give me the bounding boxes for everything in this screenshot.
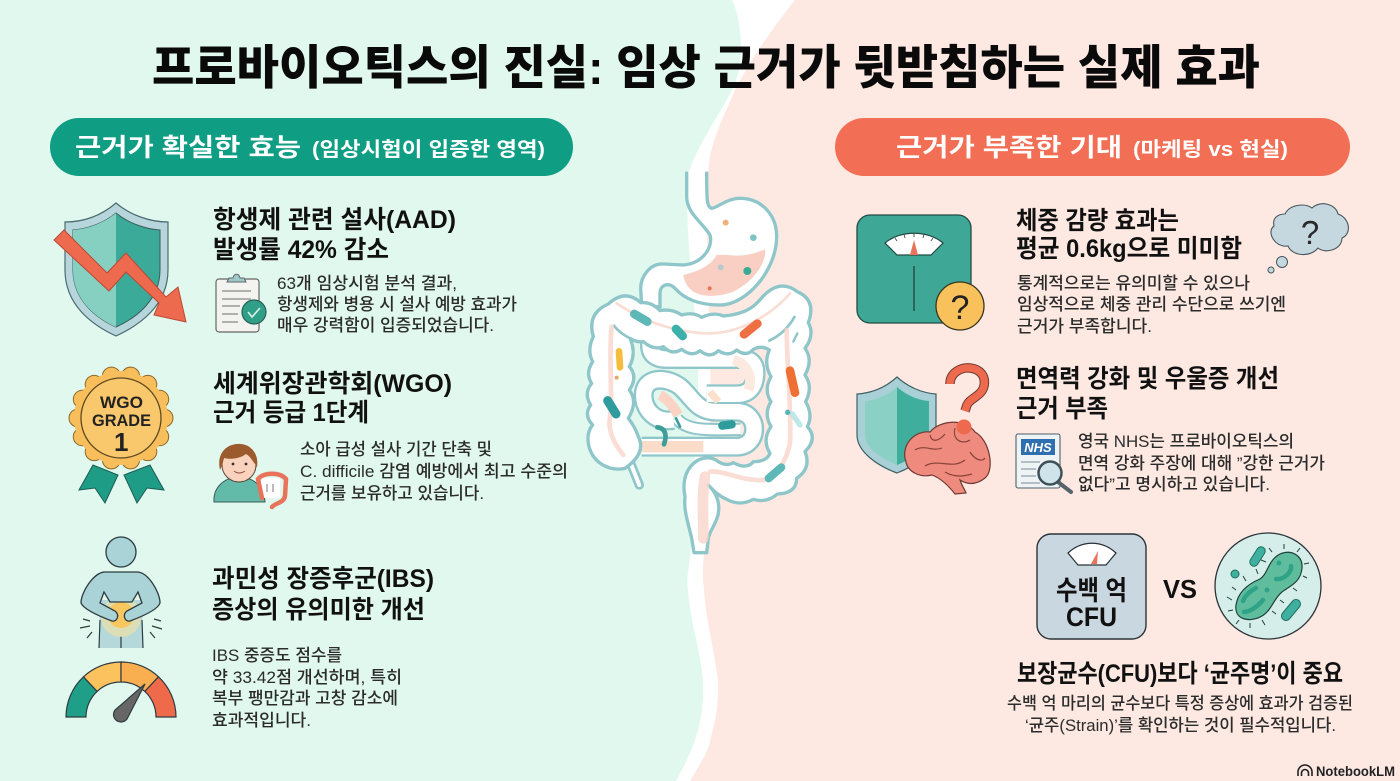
text: weight loss detail: 임상적으로 체중 관리 수단으로 쓰기엔	[1017, 295, 1286, 314]
small intestine	[642, 303, 756, 447]
heading: weight loss: 체중 감량 효과는	[1016, 207, 1179, 235]
icon: bacterial strain under microscope	[1215, 533, 1321, 639]
icon: CFU scale card: 수백 억	[1056, 576, 1127, 606]
heading: WGO: 근거 등급 1단계	[213, 399, 369, 427]
icon: WGO grade 1 medal: GRADE	[92, 411, 151, 430]
text: NHS detail	[1078, 432, 1325, 494]
icon: thought cloud with question mark	[1268, 204, 1348, 273]
text: WGO detail: C. difficile 감염 예방에서 최고 수준의	[300, 462, 568, 481]
icon: NHS document with magnifier	[1016, 434, 1071, 492]
text: IBS detail	[212, 646, 402, 730]
heading: immunity and depression: 근거 부족	[1016, 395, 1108, 423]
stomach	[641, 172, 777, 307]
text: AAD detail: 매우 강력함이 입증되었습니다.	[277, 316, 494, 335]
heading: AAD	[213, 206, 456, 264]
left header pill: (임상시험이 입증한 영역)	[312, 138, 545, 161]
heading: IBS: 과민성 장증후군(IBS)	[212, 565, 434, 593]
text: strain detail: 수백 억 마리의 균수보다 특정 증상에 효과가 검증된	[1007, 694, 1353, 713]
large intestine	[587, 286, 812, 553]
title: 프로바이오틱스의 진실: 임상 근거가 뒷받침하는 실제 효과	[152, 41, 1260, 94]
icon: child with intestine	[214, 444, 286, 507]
text: NHS detail: 면역 강화 주장에 대해 ”강한 근거가	[1078, 454, 1325, 473]
vs label: VS	[1163, 574, 1197, 604]
right header pill	[835, 118, 1350, 176]
text: IBS detail: 효과적입니다.	[212, 711, 311, 730]
text: AAD detail: 63개 임상시험 분석 결과,	[277, 274, 457, 293]
text: NHS detail: 영국 NHS는 프로바이오틱스의	[1078, 432, 1294, 451]
icon: thought cloud with question mark: ?	[1301, 214, 1319, 251]
heading: IBS	[212, 565, 434, 624]
text: weight loss detail: 근거가 부족합니다.	[1017, 317, 1152, 336]
background: right peach panel	[690, 0, 1400, 781]
icon: bathroom scale with question: ?	[951, 289, 969, 327]
text: weight loss detail	[1017, 274, 1286, 336]
appendix	[630, 462, 639, 485]
icon: person with abdominal pain	[80, 537, 162, 648]
heading: weight loss: 평균 0.6kg으로 미미함	[1016, 235, 1242, 263]
icon: clipboard with check	[216, 274, 266, 332]
icon: NHS document with magnifier: NHS	[1024, 440, 1052, 455]
icon: severity gauge	[66, 662, 176, 722]
right header pill: (마케팅 vs 현실)	[1133, 138, 1288, 161]
gut bacteria	[608, 314, 800, 478]
background: left mint panel	[0, 0, 741, 781]
left header pill	[50, 118, 573, 176]
colon pink lining	[609, 293, 790, 538]
text: strain detail: ‘균주(Strain)’를 확인하는 것이 필수적입니다.	[1025, 716, 1336, 735]
colon fold lines	[613, 316, 795, 341]
heading: strain over CFU: 보장균수(CFU)보다 ‘균주명’이 중요	[1017, 660, 1343, 688]
text: strain detail	[1007, 694, 1353, 735]
icon: bathroom scale with question	[857, 215, 984, 330]
text: IBS detail: IBS 중증도 점수를	[212, 646, 342, 665]
text: IBS detail: 약 33.42점 개선하며, 특히	[212, 668, 402, 687]
text: NHS detail: 없다”고 명시하고 있습니다.	[1078, 475, 1270, 494]
heading: AAD: 항생제 관련 설사(AAD)	[213, 206, 456, 234]
text: WGO detail: 소아 급성 설사 기간 단축 및	[300, 440, 492, 459]
text: weight loss detail: 통계적으로는 유의미할 수 있으나	[1017, 274, 1250, 293]
text: IBS detail: 복부 팽만감과 고창 감소에	[212, 689, 398, 708]
heading: weight loss	[1016, 207, 1242, 263]
heading: AAD: 발생률 42% 감소	[213, 236, 389, 264]
icon: WGO grade 1 medal: WGO	[100, 393, 143, 412]
heading: WGO	[213, 370, 452, 427]
NotebookLM logo: NotebookLM	[1316, 764, 1395, 779]
right header pill: 근거가 부족한 기대	[896, 134, 1122, 162]
icon: WGO grade 1 medal	[69, 367, 173, 503]
heading: immunity and depression: 면역력 강화 및 우울증 개선	[1016, 365, 1279, 393]
text: WGO detail: 근거를 보유하고 있습니다.	[300, 484, 484, 503]
text: AAD detail: 항생제와 병용 시 설사 예방 효과가	[277, 295, 517, 314]
heading: WGO: 세계위장관학회(WGO)	[213, 370, 452, 398]
icon: shield, brain and question mark	[857, 368, 990, 494]
heading: IBS: 증상의 유의미한 개선	[212, 596, 425, 624]
text: WGO detail	[300, 440, 568, 503]
heading: immunity and depression	[1016, 365, 1279, 423]
illustration: digestive tract	[587, 172, 812, 553]
left header pill: 근거가 확실한 효능	[75, 134, 301, 162]
icon: WGO grade 1 medal: 1	[114, 427, 128, 457]
text: AAD detail	[277, 274, 517, 335]
icon: CFU scale card	[1037, 534, 1146, 639]
icon: shield with falling arrow	[54, 203, 186, 336]
icon: CFU scale card: CFU	[1066, 602, 1117, 632]
